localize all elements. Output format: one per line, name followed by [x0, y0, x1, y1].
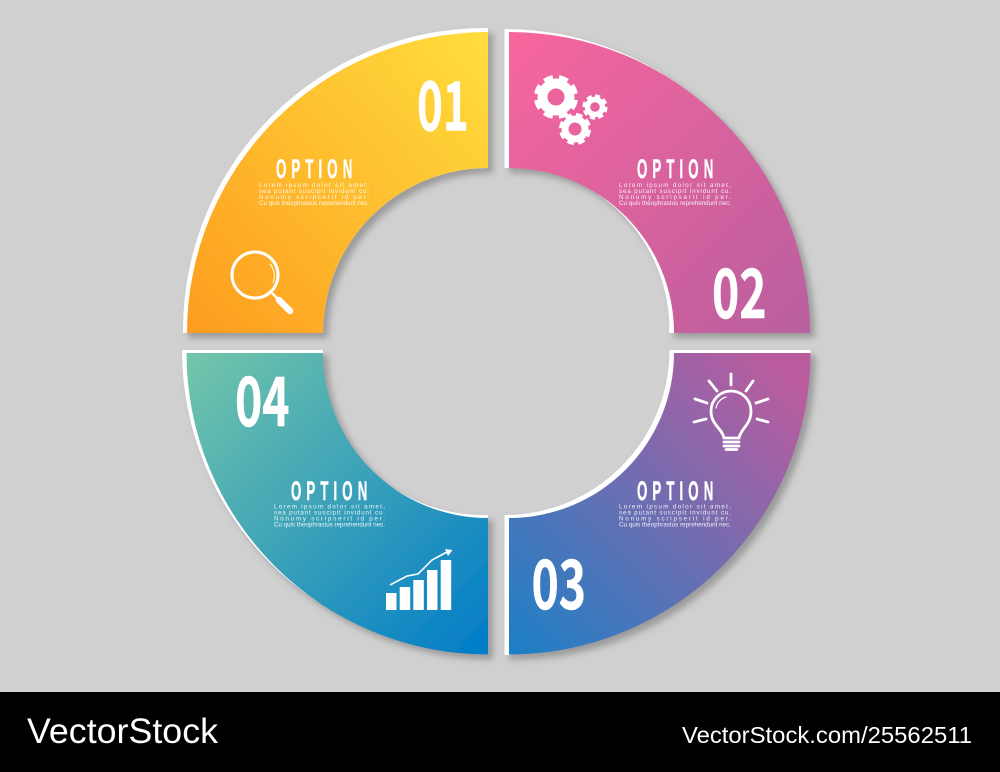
- panel: option 04: [182, 348, 488, 654]
- heading: option 03: OPTION: [637, 477, 718, 506]
- footer band: [0, 692, 1000, 772]
- text block 03: Nonumy scripserit id per.: [619, 516, 731, 522]
- text block 02: sea putant suscipit invidunt cu.: [619, 188, 731, 195]
- text block 02: Nonumy scripserit id per.: [619, 194, 731, 201]
- image reference: VectorStock.com/25562511: [682, 722, 972, 748]
- text block 01: Cu quis theophrastus reprehendunt nec.: [259, 200, 369, 207]
- icon: gears: [533, 74, 606, 144]
- number 02: 02: [712, 240, 767, 338]
- text block 04: sea putant suscipit invidunt cu.: [274, 510, 385, 516]
- icon: rising bar chart: [386, 549, 452, 610]
- text block 01: Nonumy scripserit id per.: [259, 194, 369, 201]
- number 04: 04: [235, 348, 290, 446]
- brand name: VectorStock: [27, 712, 219, 751]
- text block 03: Cu quis theophrastus reprehendunt nec.: [619, 522, 731, 528]
- heading: option 01: OPTION: [276, 155, 357, 184]
- text block 01: [259, 182, 369, 207]
- number 01: 01: [417, 53, 469, 151]
- text block 04: [274, 504, 385, 528]
- text block 02: Cu quis theophrastus reprehendunt nec.: [619, 200, 731, 207]
- segment shape 02: [504, 29, 810, 333]
- text block 02: Lorem ipsum dolor sit amet,: [619, 182, 731, 189]
- segment shape 04: [182, 350, 488, 654]
- icon: light bulb: [694, 374, 768, 450]
- text block 04: Lorem ipsum dolor sit amet,: [274, 504, 385, 510]
- number 03: 03: [532, 531, 586, 629]
- segment shape 01: [183, 28, 488, 333]
- text block 04: Cu quis theophrastus reprehendunt nec.: [274, 522, 385, 528]
- panel: option 03: [504, 350, 810, 655]
- heading: option 02: OPTION: [637, 155, 718, 184]
- panel: option 01: [183, 28, 488, 333]
- text block 04: Nonumy scripserit id per.: [274, 516, 385, 522]
- text block 03: sea putant suscipit invidunt cu.: [619, 510, 731, 516]
- text block 01: sea putant suscipit invidunt cu.: [259, 188, 369, 195]
- text block 01: Lorem ipsum dolor sit amet,: [259, 182, 369, 189]
- icon: magnifying glass: [232, 252, 290, 311]
- text block 02: [619, 182, 731, 207]
- text block 03: [619, 504, 731, 528]
- panel: option 02: [504, 29, 810, 338]
- heading: option 04: OPTION: [291, 477, 372, 506]
- segment shape 03: [504, 350, 810, 655]
- text block 03: Lorem ipsum dolor sit amet,: [619, 504, 731, 510]
